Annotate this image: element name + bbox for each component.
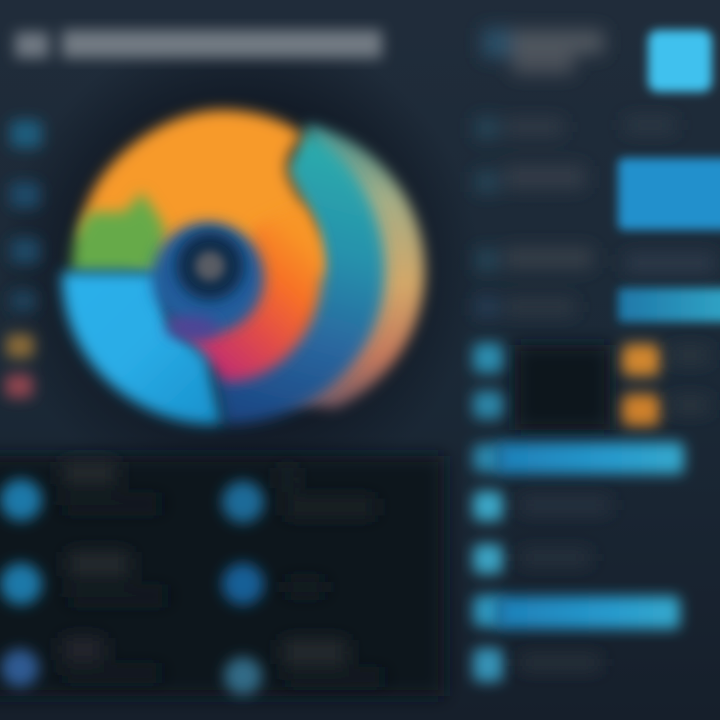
purple tint — [166, 316, 218, 340]
legend: left column dots — [5, 120, 42, 398]
bar: list highlight one — [497, 442, 684, 474]
red lower arc — [170, 205, 322, 382]
teal ring — [215, 130, 385, 424]
bar: list highlight two — [497, 596, 680, 629]
outer tan ring — [270, 124, 425, 408]
bar: right cyan block — [618, 288, 720, 322]
icons: right list dots — [473, 343, 503, 682]
inner dark hub — [176, 232, 244, 300]
chart: donut — [62, 110, 425, 424]
hub core — [195, 251, 225, 281]
donut shadow — [0, 28, 480, 508]
blue segment — [62, 272, 222, 424]
header text: top right — [482, 28, 604, 74]
green segment — [72, 192, 164, 272]
bar: upper right blue block — [618, 158, 720, 230]
inner blue disk — [152, 222, 264, 334]
title — [15, 30, 382, 58]
text: lower left labels — [62, 462, 385, 682]
icon: top right cyan square — [648, 30, 712, 92]
icons: orange dots — [622, 344, 660, 426]
text: right list lines — [520, 348, 710, 669]
panel: right side labels — [476, 118, 715, 316]
panel: right column dark panel — [515, 345, 610, 430]
orange upper arc — [80, 110, 322, 275]
icons: lower left dots — [0, 479, 264, 695]
panel: lower left dark panel — [0, 456, 444, 696]
